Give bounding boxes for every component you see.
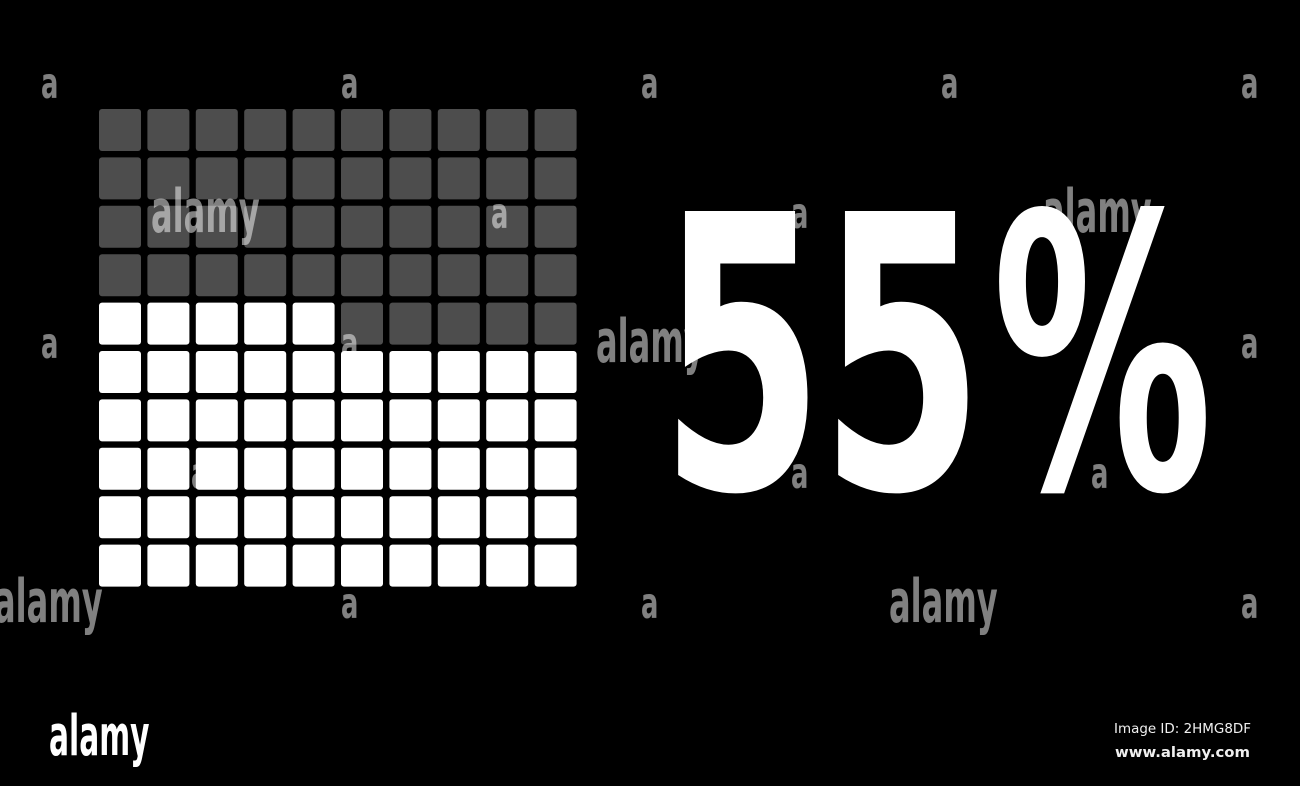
large watermark words in front: alamy (151, 177, 260, 247)
filled squares (55) (99, 303, 577, 587)
large watermark words behind number: alamy (596, 307, 705, 377)
repeating watermark letters: a (791, 449, 808, 499)
repeating watermark letters: a (191, 449, 208, 499)
repeating watermark letters (41, 59, 1258, 629)
website URL: www.alamy.com (1115, 745, 1250, 761)
repeating watermark letters: a (491, 189, 508, 239)
unfilled squares (45) (99, 109, 577, 345)
repeating watermark letters: a (641, 59, 658, 109)
brand logo: alamy: alamy (49, 703, 149, 769)
repeating watermark letters: a (791, 189, 808, 239)
large watermark words in front: alamy (889, 567, 998, 637)
repeating watermark letters: a (1241, 59, 1258, 109)
percentage number: 55%: % (992, 137, 1213, 579)
repeating watermark letters: a (1091, 449, 1108, 499)
repeating watermark letters: a (41, 59, 58, 109)
repeating watermark letters: a (1241, 579, 1258, 629)
percentage number: 55% (660, 136, 1213, 579)
percentage number: 55%: 5 (660, 136, 824, 578)
repeating watermark letters: a (641, 579, 658, 629)
image ID: Image ID: 2HMG8DF (1114, 722, 1251, 737)
large watermark words in front (0, 177, 998, 637)
repeating watermark letters: a (41, 319, 58, 369)
repeating watermark letters: a (341, 319, 358, 369)
percentage number: 55%: 5 (820, 136, 984, 578)
repeating watermark letters: a (341, 59, 358, 109)
large watermark words behind number (596, 177, 1152, 377)
repeating watermark letters: a (941, 59, 958, 109)
repeating watermark letters: a (341, 579, 358, 629)
repeating watermark letters: a (1241, 319, 1258, 369)
waffle chart: 55 of 100 squares filled (99, 109, 577, 587)
large watermark words behind number: alamy (1043, 177, 1152, 247)
